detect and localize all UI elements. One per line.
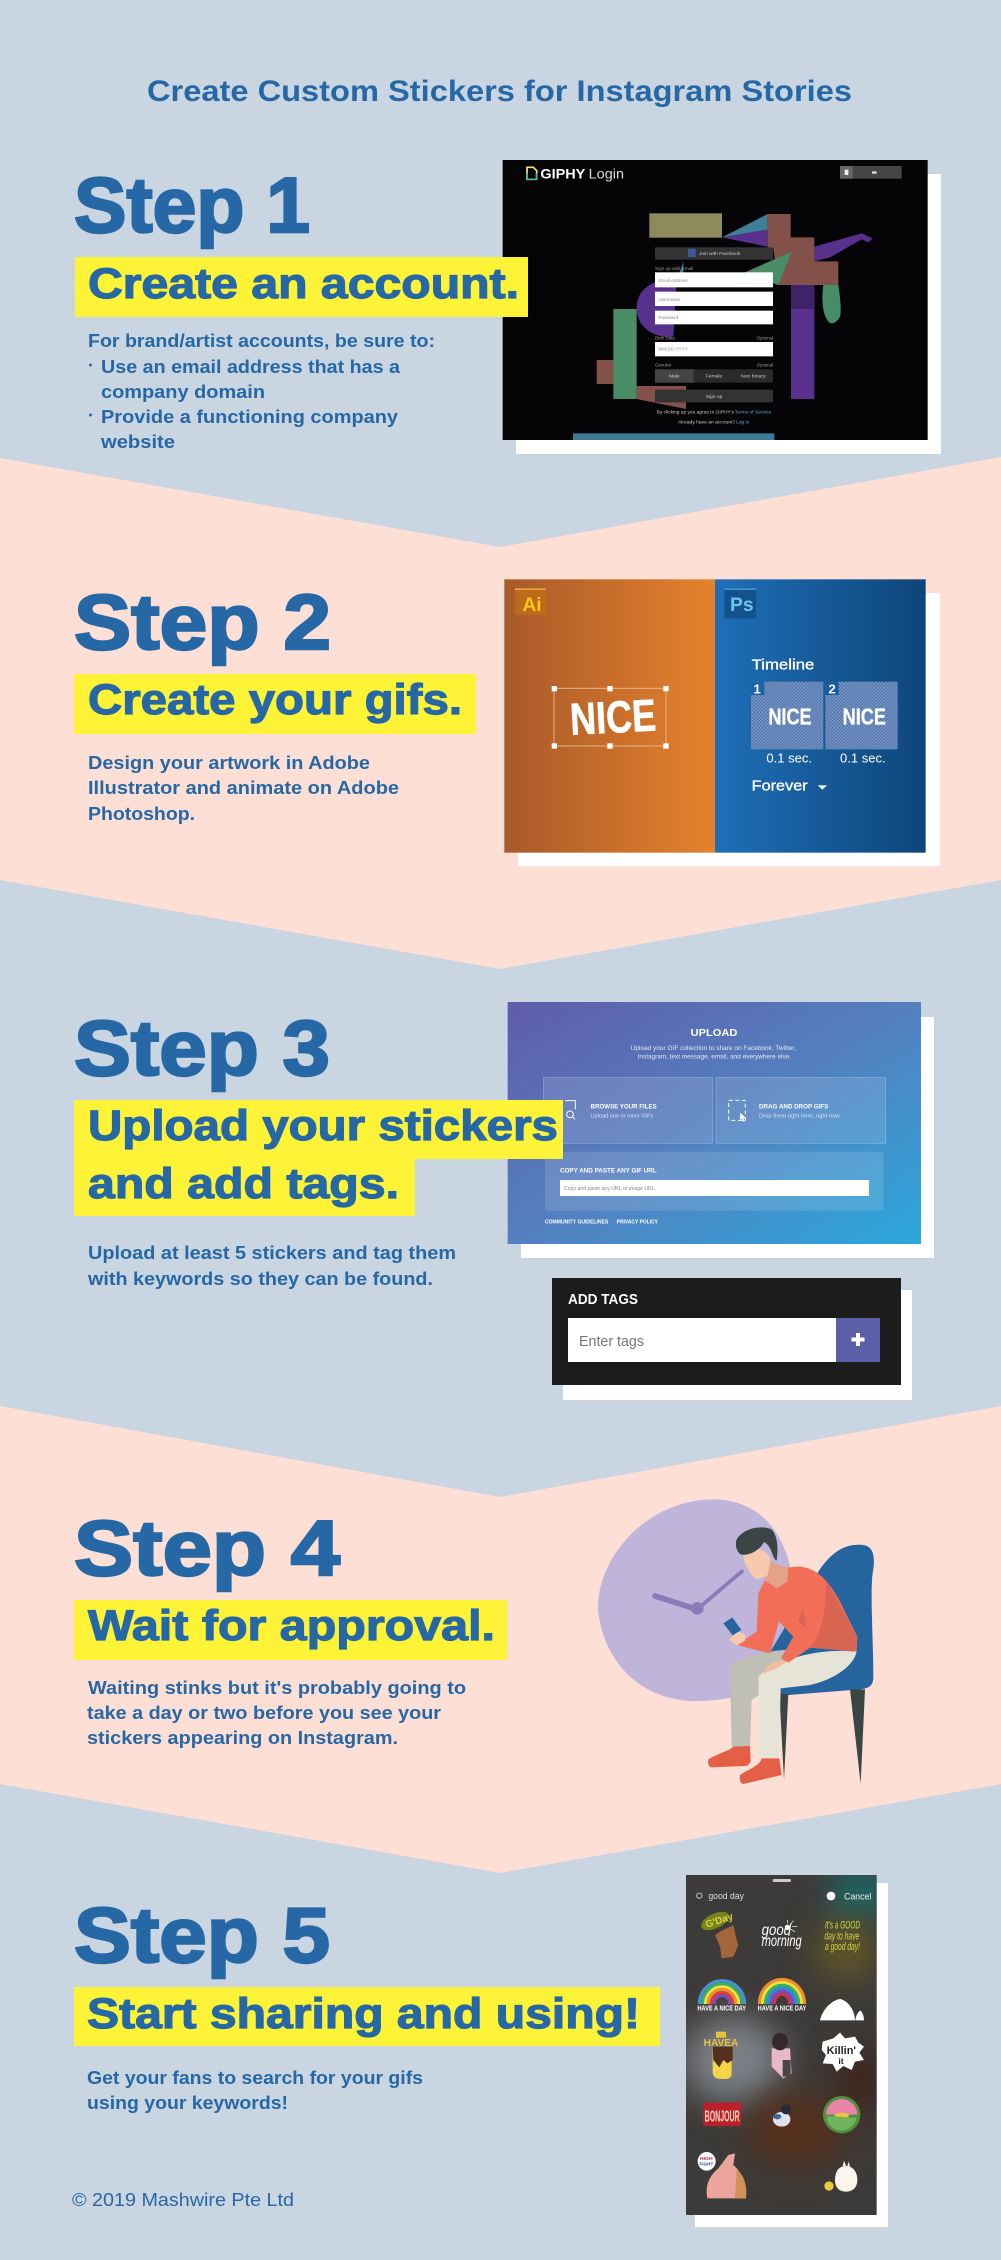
sticker: bunny: HIGH: [700, 2156, 713, 2161]
sticker: HAVEA bottle: [704, 2032, 739, 2079]
label: create your gifs: [74, 674, 476, 734]
sticker: white mounds: [820, 1999, 864, 2020]
sticker: good morning: morning: [762, 1933, 802, 1950]
panel: GIPHY login screenshot: Password: [658, 315, 679, 321]
pink band: step 4: [0, 1406, 1001, 1873]
panel: GIPHY upload screenshot: PRIVACY POLICY: [617, 1220, 658, 1226]
panel: Instagram sticker search screenshot: [683, 1867, 890, 2227]
panel: GIPHY login screenshot: [503, 160, 941, 454]
heading: step 1: Step 1: [74, 161, 310, 249]
text block: account tips: website: [100, 431, 175, 452]
text block: waiting: [87, 1677, 466, 1748]
timeline: 0.1 sec.: [766, 751, 812, 766]
label: upload your stickers and add tags: Upload your stickers: [88, 1102, 558, 1150]
text block: upload stickers: [87, 1242, 456, 1289]
sticker: rainbow 1: [697, 1981, 746, 2012]
panel: GIPHY login screenshot: Female: [706, 374, 723, 380]
sticker: bunny: FIGHT: [699, 2161, 714, 2166]
panel: GIPHY login screenshot: Username: [658, 297, 680, 303]
sticker: good morning: [762, 1920, 802, 1950]
label: wait for approval: Wait for approval.: [88, 1602, 495, 1650]
text block: design artwork: Illustrator and animate on Adobe: [88, 777, 399, 798]
panel: add tags box: [552, 1278, 912, 1400]
panel: GIPHY upload screenshot: Instagram, text message, email, and everywhere else.: [638, 1053, 791, 1060]
panel: GIPHY login screenshot: Birth Date: [655, 336, 676, 341]
panel: GIPHY login screenshot: Login: [589, 166, 624, 181]
section: step 5 text: [74, 1891, 660, 2113]
icon: Illustrator: Ai: [522, 595, 542, 616]
panel: GIPHY login screenshot: Already have an account?: [678, 419, 736, 425]
text block: upload stickers: Upload at least 5 stickers and tag them: [88, 1242, 456, 1263]
sticker: white blob and chick: [824, 2161, 857, 2192]
panel: GIPHY upload screenshot: Copy and paste any URL or image URL: [564, 1186, 655, 1192]
text block: account tips: Use an email address that has a: [101, 356, 401, 377]
heading: step 2: Step 2: [74, 578, 331, 666]
pink band: step 2: [0, 457, 1001, 969]
sticker: bunny: [698, 2152, 746, 2198]
section: step 4 text: [74, 1504, 507, 1748]
panel: GIPHY login screenshot: Optional: [757, 363, 773, 368]
illustration: man waiting with clock: [598, 1499, 874, 1784]
sticker: Killin' it burst: it: [838, 2056, 844, 2066]
panel: GIPHY upload screenshot: Upload your GIF collection to share on Facebook, Twitter,: [631, 1045, 796, 1052]
timeline: 0.1 sec.: [840, 751, 886, 766]
text block: design artwork: Photoshop.: [88, 803, 195, 824]
label: create an account: Create an account.: [88, 260, 519, 308]
panel: GIPHY login screenshot: MM-DD-YYYY: [658, 347, 688, 353]
panel: GIPHY login screenshot: Non binary: [741, 374, 766, 380]
footer copyright: © 2019 Mashwire Pte Ltd: [72, 2189, 294, 2210]
sticker: good day text: It's a GOOD: [825, 1919, 860, 1931]
sticker: Killin' it burst: Killin': [827, 2045, 856, 2057]
text block: account tips: [88, 330, 435, 452]
panel: GIPHY upload screenshot: UPLOAD: [691, 1028, 737, 1039]
panel: add tags box: Enter tags: [579, 1333, 644, 1350]
panel: GIPHY upload screenshot: Drop them right here, right now: [759, 1113, 841, 1119]
panel: GIPHY login screenshot: Male: [669, 374, 680, 380]
search bar: good day: [708, 1891, 744, 1901]
section: step 3 text: [74, 1004, 563, 1289]
sticker: good day text: [824, 1919, 860, 1953]
section: step 1 text: [74, 161, 528, 452]
icon: Photoshop: [724, 588, 756, 618]
text block: waiting: take a day or two before you see your: [87, 1702, 441, 1723]
section: step 2 text: [74, 578, 476, 824]
text block: upload stickers: with keywords so they can be found.: [87, 1268, 433, 1289]
timeline: Forever: [752, 779, 808, 795]
label: create an account: [75, 257, 528, 317]
panel: GIPHY login screenshot: Terms of Service: [735, 410, 772, 416]
text block: account tips: company domain: [101, 381, 265, 402]
sticker: dog in pink: [772, 2033, 792, 2078]
panel: GIPHY login screenshot: GIPHY: [540, 166, 585, 181]
search bar: [697, 1891, 871, 1901]
panel: GIPHY login screenshot: Email Address: [658, 278, 688, 284]
panel: GIPHY upload screenshot: COPY AND PASTE ANY GIF URL: [560, 1167, 657, 1174]
sticker: red Bonjour: [703, 2103, 741, 2126]
sticker: good morning: good: [762, 1922, 791, 1939]
panel: GIPHY login screenshot: Join with Facebook: [699, 251, 741, 257]
label: start sharing and using: [74, 1987, 660, 2046]
sticker: G'Day kangaroo: [698, 1908, 738, 1958]
timeline: 1: [753, 681, 761, 696]
panel: GIPHY login screenshot: By clicking up you agree to GIPHY's: [657, 410, 734, 416]
panel: add tags box: ADD TAGS: [568, 1291, 638, 1308]
text block: account tips: Provide a functioning company: [101, 406, 399, 427]
panel: GIPHY login screenshot: Gender: [655, 363, 672, 368]
sticker: rainbow 2: HAVE A NICE DAY: [758, 2005, 807, 2012]
timeline: 2: [828, 681, 836, 696]
panel: GIPHY login screenshot: Optional: [757, 336, 773, 341]
panel: GIPHY upload screenshot: DRAG AND DROP GIFS: [759, 1103, 828, 1110]
label: upload your stickers and add tags: [74, 1100, 563, 1216]
panel: GIPHY upload screenshot: Upload one or more GIFs: [591, 1113, 653, 1119]
text block: design artwork: [88, 752, 399, 824]
panel: GIPHY login screenshot: Sign up: [706, 394, 723, 400]
sticker: rainbow 1: HAVE A NICE DAY: [697, 2005, 746, 2012]
sticker: good day text: day to have: [824, 1930, 859, 1942]
heading: step 4: Step 4: [74, 1504, 340, 1592]
timeline: Timeline: [752, 657, 814, 673]
panel: GIPHY upload screenshot: [508, 1002, 934, 1258]
sticker: good day text: a good day!: [825, 1941, 860, 1953]
panel: GIPHY upload screenshot: COMMUNITY GUIDELINES: [545, 1220, 609, 1226]
artwork: NICE selection: NICE: [569, 689, 657, 745]
text block: account tips: For brand/artist accounts, be sure to:: [88, 330, 435, 351]
text block: waiting: stickers appearing on Instagram.: [87, 1727, 398, 1748]
text block: get your fans: using your keywords!: [87, 2092, 288, 2113]
timeline: [751, 657, 898, 795]
text block: waiting: Waiting stinks but it's probably going to: [88, 1677, 466, 1698]
sticker: Killin' it burst: [822, 2033, 864, 2072]
heading: step 3: Step 3: [74, 1004, 330, 1092]
label: wait for approval: [74, 1600, 507, 1660]
text block: get your fans: Get your fans to search for your gifs: [87, 2067, 423, 2088]
timeline: NICE: [843, 704, 886, 730]
icon: Photoshop: Ps: [730, 595, 754, 616]
sticker: rainbow 2: [758, 1979, 807, 2012]
panel: GIPHY login screenshot: Sign up with Email: [655, 266, 693, 271]
panel: Illustrator and Photoshop artwork: [504, 579, 940, 866]
panel: Instagram sticker search screenshot: BONJOUR: [705, 2109, 740, 2126]
label: create your gifs: Create your gifs.: [88, 676, 462, 724]
sticker: landscape circle: [823, 2096, 860, 2133]
panel: GIPHY login screenshot: Log in: [736, 419, 750, 425]
text block: get your fans: [87, 2067, 423, 2113]
label: upload your stickers and add tags: and add tags.: [88, 1160, 399, 1208]
panel: GIPHY upload screenshot: BROWSE YOUR FILES: [591, 1103, 657, 1110]
timeline: NICE: [768, 704, 812, 730]
sticker: G'Day kangaroo: G'Day: [704, 1911, 735, 1931]
search bar: Cancel: [844, 1891, 871, 1901]
sticker: HAVEA bottle: HAVEA: [704, 2038, 739, 2049]
heading: step 5: Step 5: [74, 1891, 330, 1979]
icon: Illustrator: [515, 588, 546, 616]
sticker: penguin: [773, 2104, 791, 2127]
text block: design artwork: Design your artwork in Adobe: [88, 752, 370, 773]
label: start sharing and using: Start sharing and using!: [87, 1990, 640, 2038]
title: Create Custom Stickers for Instagram Stories: [147, 75, 852, 108]
